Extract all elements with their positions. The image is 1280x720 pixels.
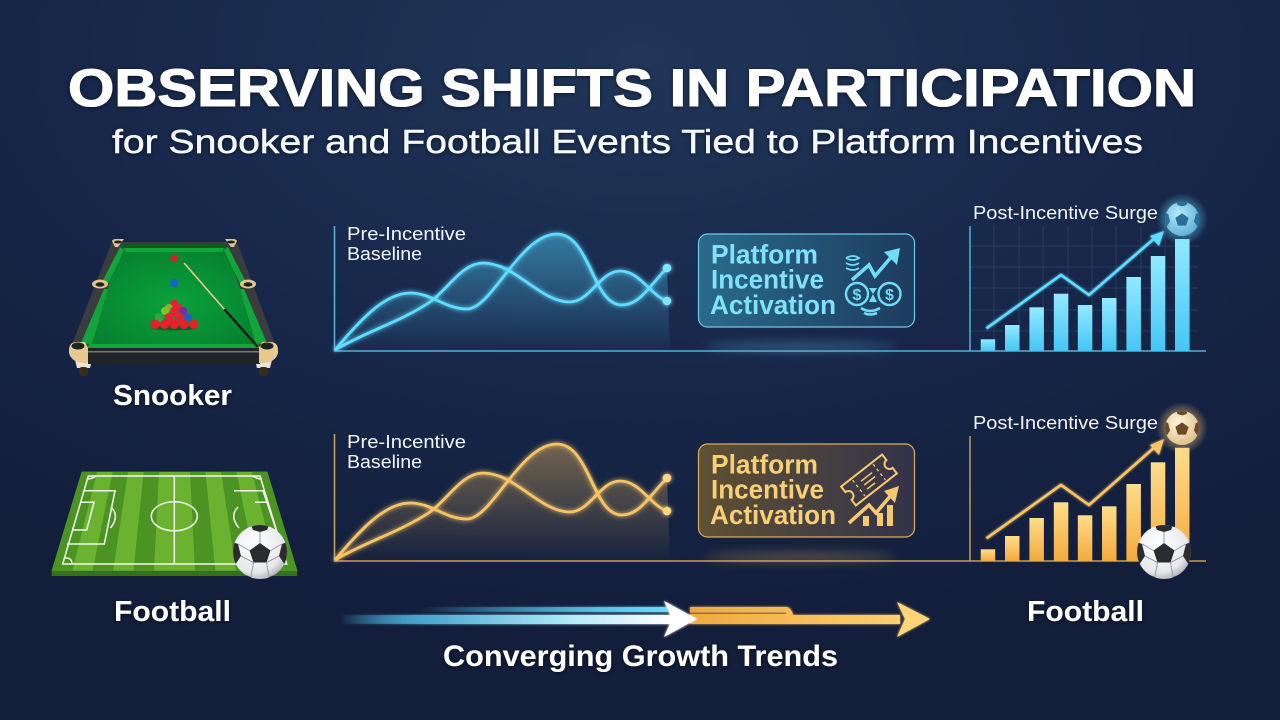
axis glow: snooker xyxy=(705,342,895,352)
table legs xyxy=(75,360,272,376)
line chart: snooker baseline xyxy=(334,224,700,351)
icon: coins and growth arrow: $ xyxy=(853,287,862,304)
front rail xyxy=(88,348,260,364)
cue xyxy=(184,264,257,346)
icon: glowing blue ball xyxy=(1156,193,1208,245)
bar chart: football post-incentive surge xyxy=(700,402,1208,582)
icon: coins and growth arrow: $ xyxy=(885,287,894,304)
callout text: Incentive xyxy=(711,474,824,504)
axes xyxy=(700,436,1206,561)
arrow: blue-white converging arrow xyxy=(340,601,697,637)
label: pre-incentive baseline: Pre-Incentive xyxy=(347,432,466,452)
axes xyxy=(334,226,700,351)
area fill xyxy=(335,444,670,561)
grid xyxy=(970,226,1198,351)
icon: large soccer ball xyxy=(1135,525,1193,582)
corner pockets front xyxy=(69,342,88,363)
pitch markings xyxy=(63,476,287,564)
snooker balls xyxy=(150,254,198,330)
label: pre-incentive baseline: Baseline xyxy=(347,452,422,472)
soccer ball xyxy=(231,525,289,582)
callout text: Incentive xyxy=(711,264,824,294)
icon: snooker table xyxy=(69,239,278,376)
label: converging growth trends: Converging Growth Trends xyxy=(443,640,838,673)
icon: football pitch xyxy=(52,472,297,582)
label: post-incentive surge: Post-Incentive Surge xyxy=(973,203,1158,223)
axes xyxy=(334,434,700,561)
arrow: gold converging arrow xyxy=(690,602,930,637)
trend arrow xyxy=(986,231,1164,328)
callout text: Activation xyxy=(710,290,836,320)
pockets xyxy=(92,239,256,288)
callout text: Platform xyxy=(711,450,818,480)
callout: platform incentive activation, football xyxy=(698,444,914,537)
cushions xyxy=(81,247,267,348)
line chart: football baseline xyxy=(334,432,700,561)
icon: coins and growth arrow xyxy=(846,248,900,314)
label: Snooker: Snooker xyxy=(113,380,232,412)
label: Football left: Football xyxy=(114,596,231,628)
callout: platform incentive activation, snooker xyxy=(698,234,914,327)
label: pre-incentive baseline: Pre-Incentive xyxy=(347,224,466,244)
callout text: Platform xyxy=(711,240,818,270)
callout text: Activation xyxy=(710,500,836,530)
pitch base xyxy=(52,472,297,576)
curves xyxy=(335,234,671,350)
area fill xyxy=(335,234,670,351)
bars xyxy=(981,239,1190,351)
mown stripes xyxy=(52,472,297,571)
felt xyxy=(87,247,260,348)
title: OBSERVING SHIFTS IN PARTICIPATION xyxy=(68,59,1196,118)
axes xyxy=(700,226,1206,351)
label: Football right: Football xyxy=(1027,596,1144,628)
icon: glowing gold ball xyxy=(1156,402,1208,454)
trend arrow xyxy=(986,439,1164,538)
label: post-incentive surge: Post-Incentive Surge xyxy=(973,413,1158,433)
table frame xyxy=(69,242,278,352)
curves xyxy=(335,444,671,560)
top rail shadow xyxy=(122,244,226,248)
bar chart: snooker post-incentive surge xyxy=(700,193,1208,351)
axis glow: football xyxy=(705,552,895,562)
label: pre-incentive baseline: Baseline xyxy=(347,244,422,264)
bars xyxy=(981,448,1190,561)
subtitle: for Snooker and Football Events Tied to Platform Incentives xyxy=(112,123,1143,160)
icon: ticket and growth arrow xyxy=(841,455,899,526)
